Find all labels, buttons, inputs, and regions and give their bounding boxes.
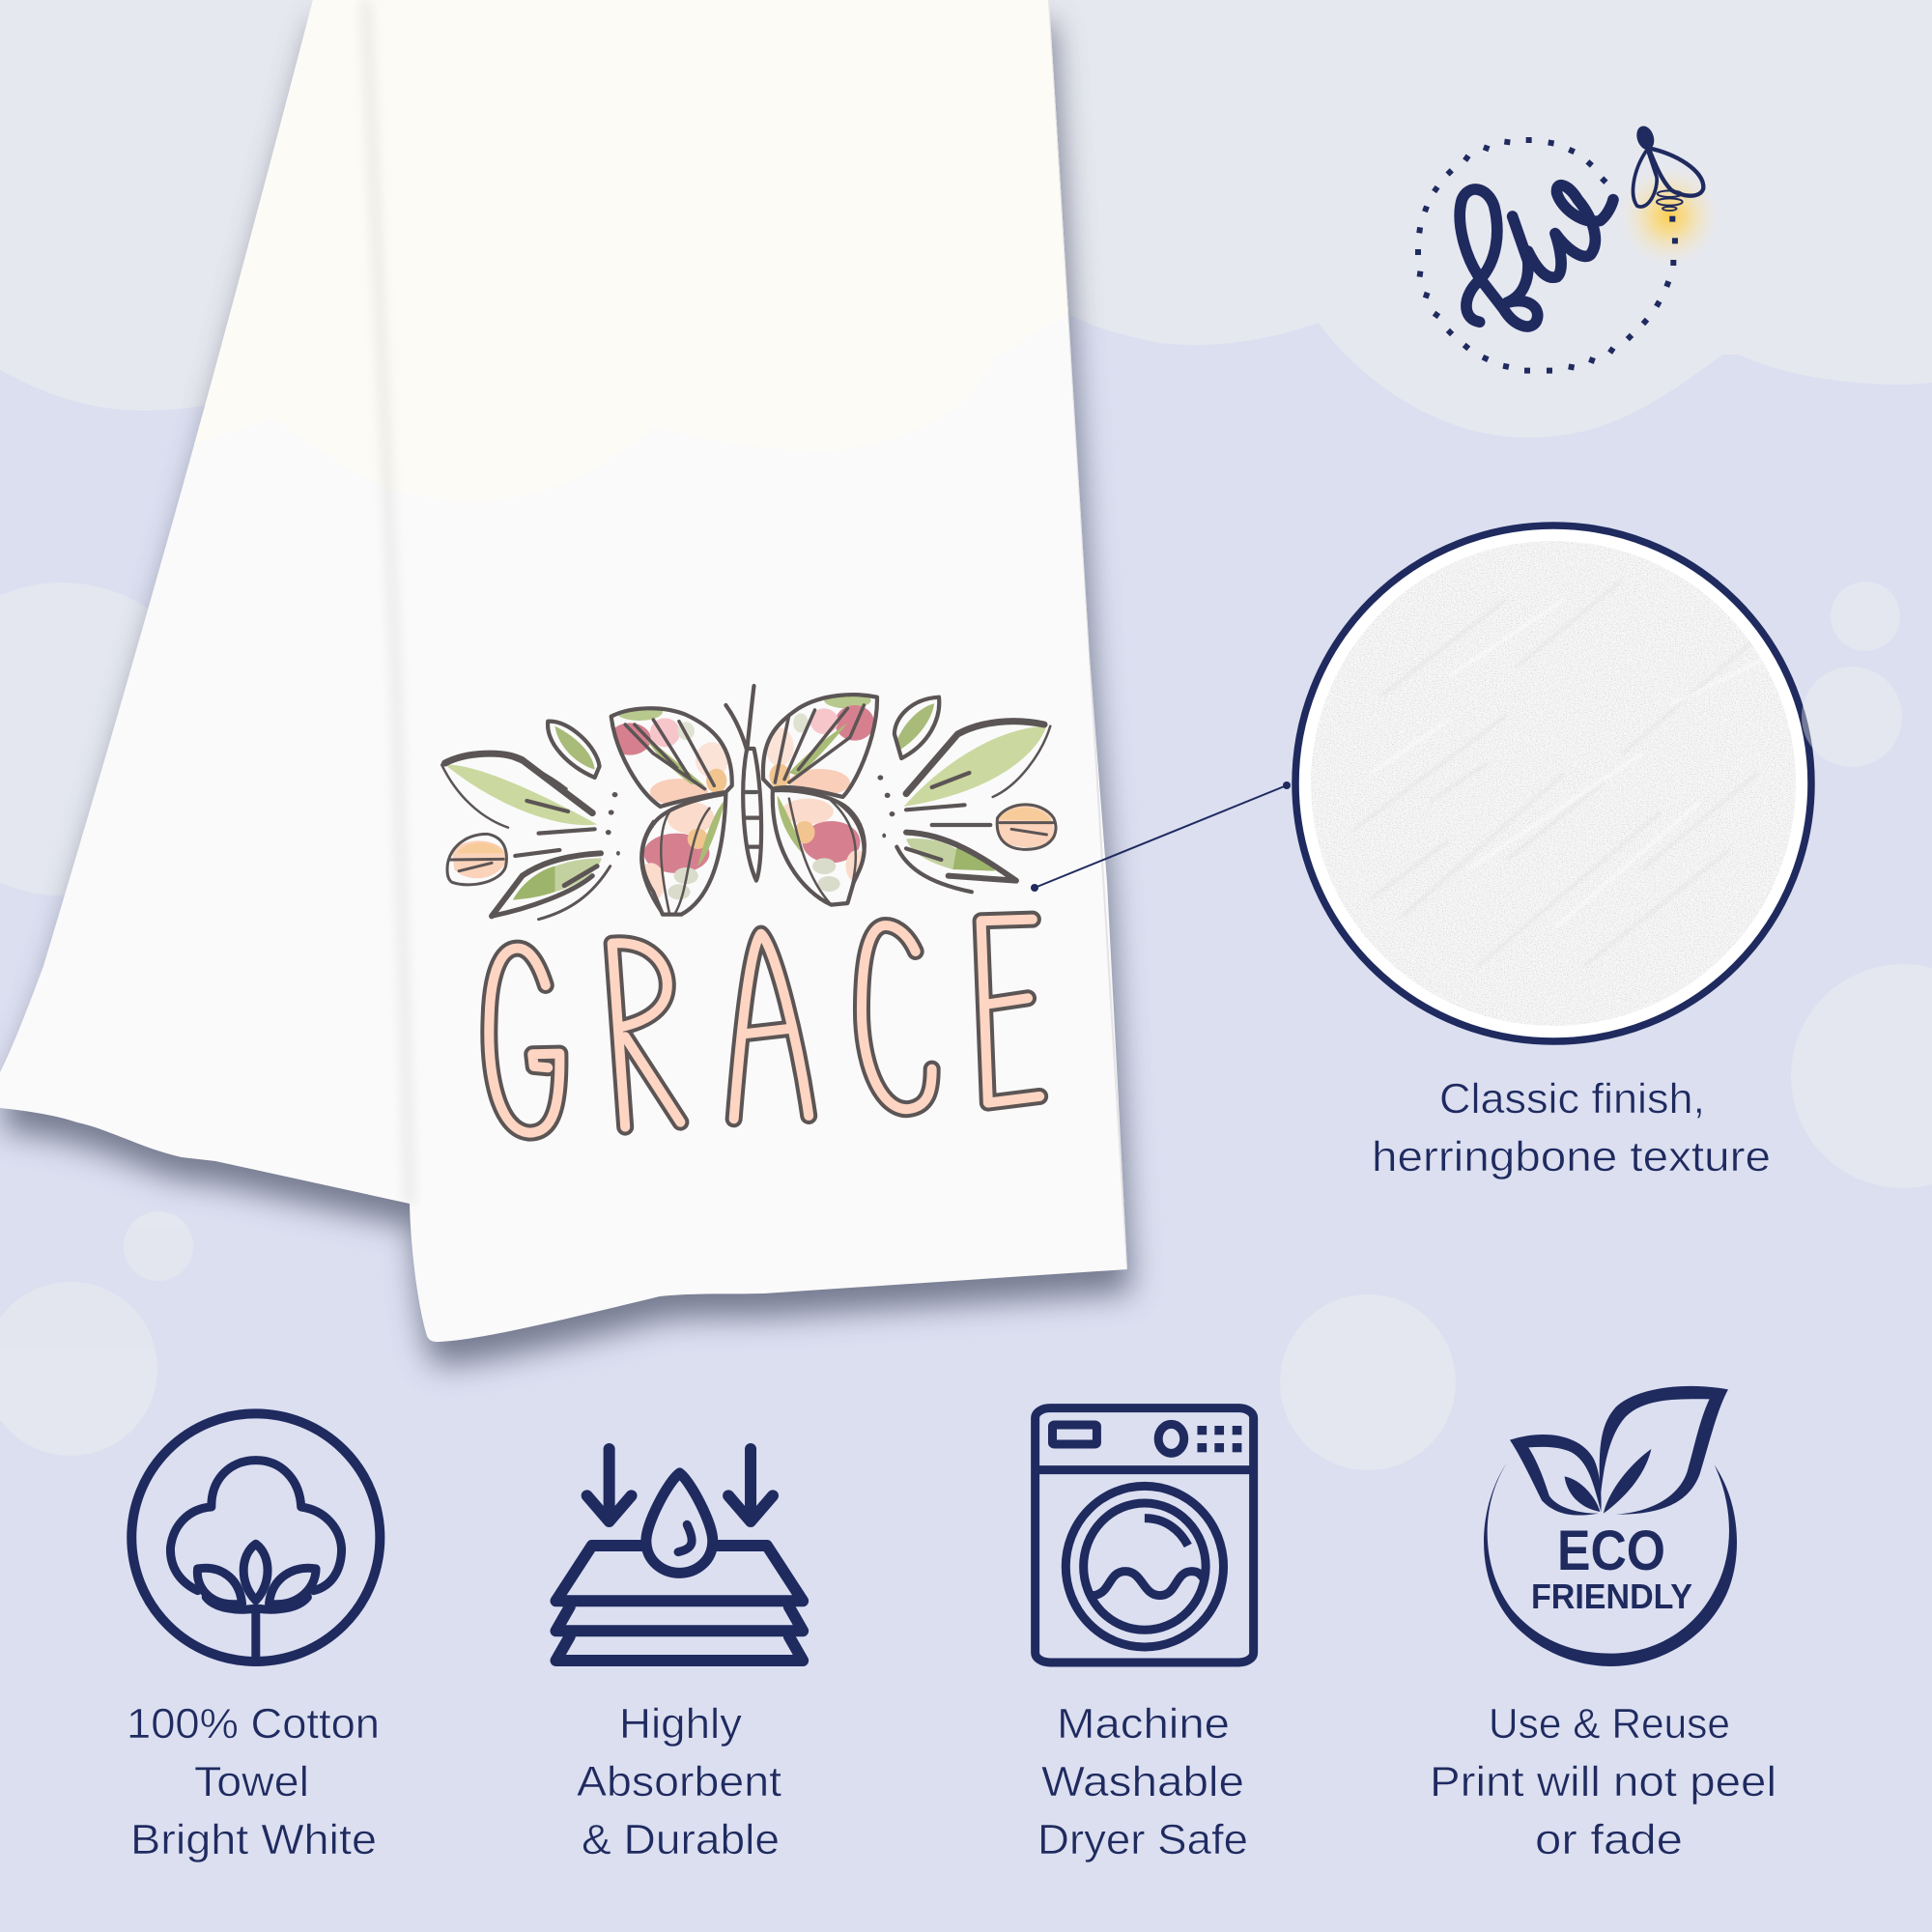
towel print: butterfly and leaves — [441, 686, 1056, 920]
word as real text: GRACE — [752, 1128, 755, 1131]
label: absorbent: Absorbent — [577, 1758, 781, 1805]
icon: eco friendly badge: FRIENDLY — [1531, 1577, 1692, 1616]
feature: absorbent — [556, 1449, 803, 1863]
firefly — [1634, 126, 1703, 211]
background cloud band — [0, 0, 1932, 438]
label: eco friendly: Use & Reuse — [1489, 1700, 1730, 1747]
fabric swatch callout — [1031, 526, 1811, 1180]
swatch caption — [1372, 1075, 1771, 1180]
icon: washing machine — [1036, 1408, 1254, 1662]
towel shadow — [4, 23, 1131, 1365]
connector line — [1031, 781, 1291, 892]
icon: absorbent layers — [556, 1449, 803, 1661]
icon: eco friendly badge: ECO — [1557, 1520, 1665, 1582]
towel print: GRACE lettering — [489, 920, 1039, 1133]
label: cotton: Bright White — [130, 1816, 377, 1863]
label: eco friendly: or fade — [1535, 1816, 1683, 1863]
bubble over swatch edge — [1802, 667, 1902, 767]
label: washable — [1037, 1700, 1248, 1863]
dots beside wings — [606, 775, 895, 856]
towel fabric — [0, 0, 1127, 1342]
label: eco friendly: Print will not peel — [1430, 1758, 1776, 1805]
towel cream upper tint — [193, 0, 1159, 1269]
watercolor fills — [445, 693, 1056, 901]
feature: washable — [1036, 1408, 1254, 1863]
towel fold crease — [366, 0, 410, 1204]
swatch circle — [1295, 526, 1811, 1041]
label: washable: Washable — [1041, 1758, 1244, 1805]
ink outlines — [441, 686, 1056, 920]
label: cotton: 100% Cotton — [127, 1700, 380, 1747]
label: eco friendly — [1430, 1700, 1776, 1863]
label: cotton: Towel — [194, 1758, 309, 1805]
feature: eco friendly — [1430, 1386, 1776, 1863]
icon: cotton boll — [131, 1413, 380, 1662]
logo — [1415, 126, 1719, 374]
script monogram — [1460, 185, 1613, 327]
label: cotton — [127, 1700, 380, 1863]
firefly glow — [1620, 166, 1719, 266]
dotted ring — [1415, 137, 1678, 374]
swatch caption: herringbone texture — [1372, 1133, 1771, 1180]
decorative bubbles — [0, 582, 1932, 1470]
feature: cotton — [127, 1413, 380, 1863]
label: washable: Machine — [1057, 1700, 1230, 1747]
label: absorbent — [577, 1700, 781, 1863]
towel photo — [0, 0, 1159, 1365]
icon: eco friendly badge — [1484, 1386, 1737, 1666]
swatch caption: Classic finish, — [1439, 1075, 1705, 1122]
label: washable: Dryer Safe — [1037, 1816, 1248, 1863]
label: absorbent: Highly — [619, 1700, 742, 1747]
label: absorbent: & Durable — [582, 1816, 780, 1863]
